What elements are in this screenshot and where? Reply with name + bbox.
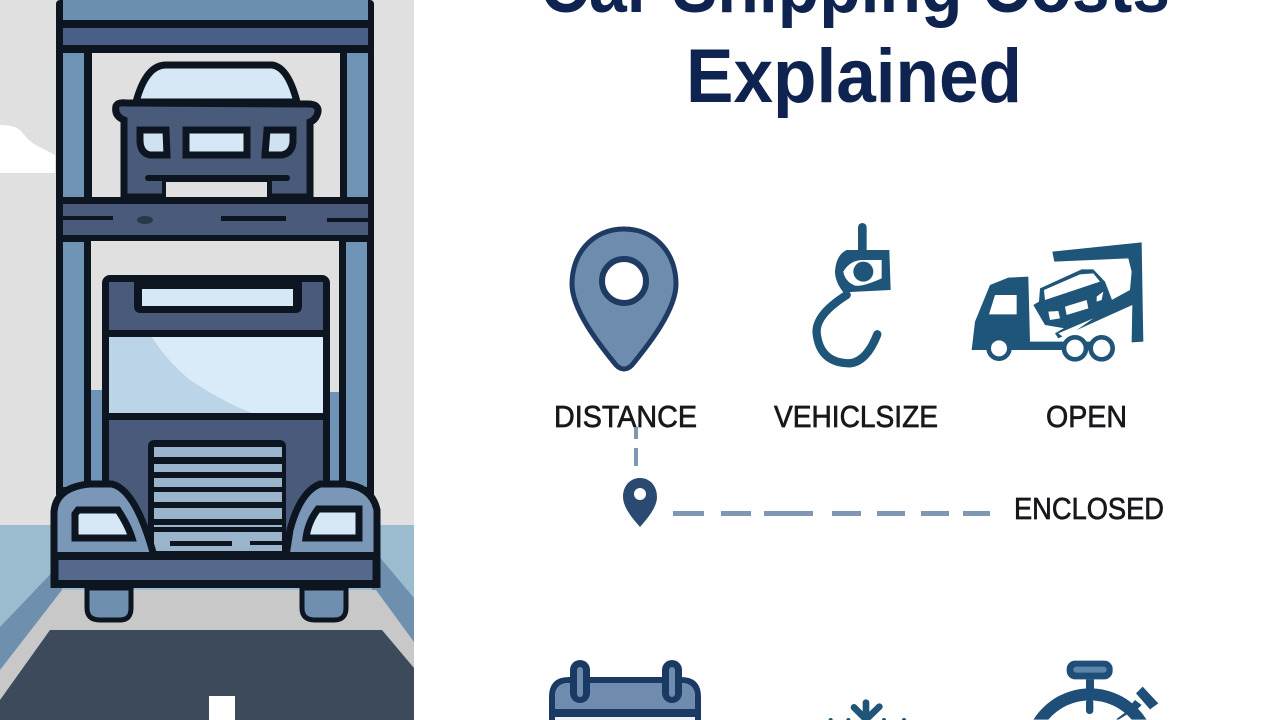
icon: open carrier truck [972,242,1143,359]
fenders and headlights [54,484,377,556]
icon: distance pin [572,229,676,369]
dashed connector [634,427,990,516]
icon: calendar [549,660,701,720]
bumper [54,556,376,584]
car on upper deck [116,65,318,197]
label: open: OPEN [1046,399,1127,434]
icon: snowflake [829,703,906,720]
road scene [0,525,414,720]
icon: stopwatch [1033,661,1158,720]
labels [554,399,1164,526]
truck cab [102,275,330,565]
carrier frame [56,0,374,495]
grille [148,440,286,554]
icon: small pin [623,478,657,527]
icon: hook for vehicle size [817,227,891,363]
label: enclosed: ENCLOSED [1014,491,1164,526]
label: vehicle size: VEHICLSIZE [774,399,938,434]
cloud [0,125,55,173]
title: Explained [686,34,1022,119]
title [540,0,1170,119]
panel: truck illustration [0,0,414,720]
wheels [87,588,346,620]
label: distance: DISTANCE [554,399,697,434]
